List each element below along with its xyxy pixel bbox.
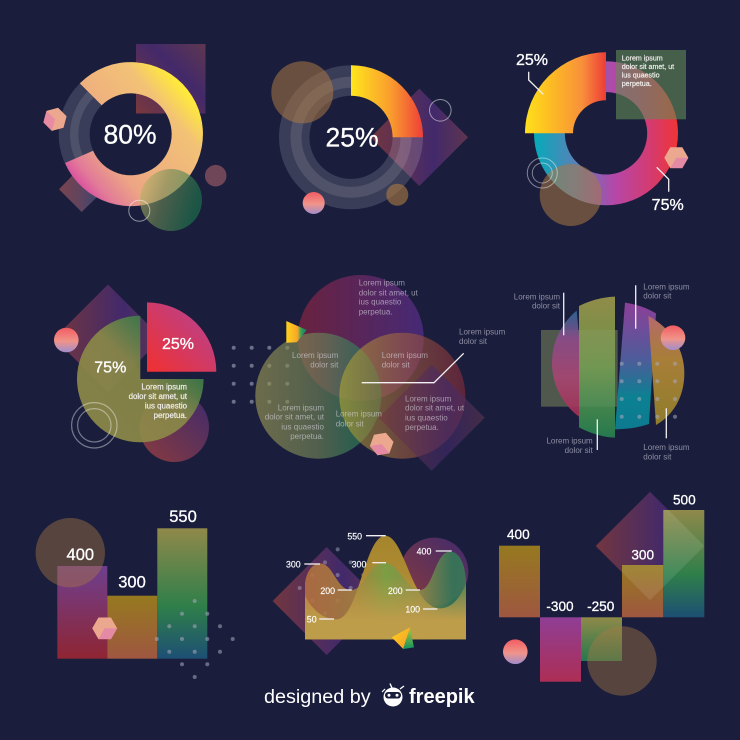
label top right: dolor sit bbox=[643, 292, 672, 301]
text block: Lorem ipsum bbox=[622, 54, 663, 62]
green circle bbox=[140, 169, 202, 231]
value labels: 400 bbox=[417, 547, 431, 557]
bar 550 bbox=[157, 528, 207, 659]
value 80%: 80% bbox=[103, 120, 157, 150]
outline ring bbox=[129, 200, 150, 221]
small brown circle bbox=[386, 184, 408, 206]
labels bbox=[507, 492, 696, 614]
bar -250 bbox=[581, 617, 622, 661]
text block top: perpetua. bbox=[359, 307, 393, 316]
text label bottom overlap: Lorem ipsum bbox=[336, 410, 382, 419]
label bottom left: dolor sit bbox=[565, 446, 593, 455]
labels: -250 bbox=[587, 599, 615, 614]
text block right circle: Lorem ipsum bbox=[405, 394, 452, 403]
text label right overlap: dolor sit bbox=[382, 360, 410, 369]
right circle bbox=[339, 333, 465, 459]
panel: venn diagram bbox=[232, 275, 506, 471]
bar 300 bbox=[107, 596, 157, 659]
pie 75 percent bbox=[77, 316, 204, 442]
leader line 25 bbox=[529, 72, 543, 94]
text label right: Lorem ipsum bbox=[459, 327, 506, 336]
value labels bbox=[286, 531, 431, 624]
purple diamond bbox=[54, 284, 162, 392]
track ring bbox=[294, 80, 408, 194]
leader lines bbox=[564, 285, 666, 450]
pie slice 25 percent bbox=[147, 302, 216, 372]
value 25%: 25% bbox=[325, 122, 379, 152]
icon: ball bbox=[54, 328, 79, 352]
value labels: 50 bbox=[307, 614, 317, 624]
freepik wordmark: freepik bbox=[409, 686, 475, 708]
diamond bbox=[379, 365, 485, 471]
text block right circle: dolor sit amet, ut bbox=[405, 404, 465, 413]
text label right overlap: Lorem ipsum bbox=[382, 351, 428, 360]
top circle bbox=[298, 275, 424, 401]
circle bottom right bbox=[140, 393, 209, 462]
brown circle bbox=[271, 61, 333, 123]
double outline ring bbox=[527, 158, 557, 188]
text block: perpetua. bbox=[154, 411, 187, 420]
donut ring 75 percent bbox=[549, 77, 663, 190]
dots bbox=[155, 599, 235, 679]
outline ring bbox=[430, 100, 451, 121]
text block: dolor sit amet, ut bbox=[129, 392, 188, 401]
panel: donut 80% bbox=[42, 44, 227, 231]
value markers bbox=[304, 536, 452, 619]
labels: 300 bbox=[631, 548, 654, 562]
label 75%: 75% bbox=[652, 197, 684, 214]
small circle bbox=[205, 165, 226, 186]
label bottom left: Lorem ipsum bbox=[546, 437, 593, 446]
text block: Lorem ipsum bbox=[141, 382, 187, 392]
value labels: 300 bbox=[286, 560, 301, 570]
bar 500 bbox=[663, 510, 704, 617]
text block left circle: perpetua. bbox=[290, 432, 324, 441]
icon: ball bbox=[503, 639, 528, 664]
labels: -300 bbox=[546, 599, 574, 614]
value labels: 200 bbox=[320, 586, 335, 596]
diamond overlap tint bbox=[622, 510, 704, 600]
text block top: ius quaestio bbox=[359, 298, 402, 307]
wave shapes bbox=[273, 536, 468, 655]
dots bbox=[620, 362, 677, 419]
green square bbox=[616, 50, 686, 119]
text block left circle: Lorem ipsum bbox=[278, 403, 324, 412]
panel: area chart bbox=[273, 531, 468, 655]
label top left: Lorem ipsum bbox=[514, 292, 560, 301]
yellow quarter arc bbox=[525, 52, 606, 133]
label 75%: 75% bbox=[94, 360, 126, 376]
bar 400 bbox=[57, 566, 107, 659]
bar 400 bbox=[499, 546, 540, 617]
diamond bbox=[596, 492, 704, 600]
label 400: 400 bbox=[67, 546, 94, 564]
gradient slices bbox=[541, 297, 684, 438]
text block top: dolor sit amet, ut bbox=[359, 288, 419, 297]
label 300: 300 bbox=[118, 574, 146, 592]
icon: ball bbox=[303, 192, 325, 214]
donut arc 25 percent bbox=[351, 65, 423, 137]
double outline ring bbox=[72, 403, 117, 448]
value labels: 100 bbox=[405, 604, 420, 614]
label 25%: 25% bbox=[162, 336, 194, 353]
text block: perpetua. bbox=[622, 80, 652, 88]
panel: bar chart 400 300 550 bbox=[36, 508, 235, 679]
bar 300 bbox=[622, 565, 663, 617]
value labels: 300 bbox=[352, 560, 366, 570]
grey track ring bbox=[74, 78, 187, 191]
text block: ius quaestio bbox=[145, 401, 188, 410]
label top right: Lorem ipsum bbox=[643, 282, 690, 291]
donut arc 80 percent bbox=[65, 62, 203, 206]
icon: hexagon bbox=[661, 142, 691, 173]
panel: sliced circle chart bbox=[514, 282, 690, 461]
footer: freepik credit bbox=[264, 684, 475, 708]
text label bottom overlap: dolor sit bbox=[336, 419, 364, 428]
text block: dolor sit amet, ut bbox=[622, 63, 674, 71]
brown circle bbox=[540, 164, 602, 226]
value labels: 200 bbox=[388, 586, 403, 596]
icon: freepik mascot bbox=[382, 684, 404, 706]
designed by: designed by bbox=[264, 686, 371, 708]
text block left circle: dolor sit amet, ut bbox=[265, 413, 325, 422]
dots bbox=[232, 346, 289, 404]
purple square bbox=[136, 44, 206, 114]
panel: donut 75/25 bbox=[516, 50, 691, 226]
text block right circle: perpetua. bbox=[405, 423, 439, 432]
text label left overlap: dolor sit bbox=[310, 360, 339, 369]
diamond bbox=[59, 166, 105, 212]
icon: hexagon bbox=[42, 105, 68, 134]
leader line bbox=[362, 353, 464, 383]
brown circle bbox=[36, 518, 105, 587]
left circle bbox=[255, 333, 381, 459]
panel: pie 75/25 bbox=[54, 284, 216, 462]
text block right circle: ius quaestio bbox=[405, 413, 448, 422]
panel: positive and negative bars bbox=[499, 492, 704, 696]
panel: donut 25% bbox=[271, 61, 468, 214]
bar -300 bbox=[540, 617, 581, 682]
icon: hexagon bbox=[89, 612, 120, 645]
text block: ius quaestio bbox=[622, 72, 660, 80]
label bottom right: dolor sit bbox=[643, 452, 672, 461]
leader line 75 bbox=[657, 167, 669, 192]
icon: triangle bbox=[286, 321, 307, 343]
value labels: 550 bbox=[347, 531, 362, 541]
icon: hexagon bbox=[368, 429, 396, 459]
text label right: dolor sit bbox=[459, 337, 488, 346]
diamond bbox=[371, 89, 468, 186]
text label left overlap: Lorem ipsum bbox=[292, 351, 339, 360]
text block left circle: ius quaestio bbox=[281, 422, 325, 431]
labels: 500 bbox=[673, 492, 696, 508]
label top left: dolor sit bbox=[532, 302, 561, 311]
labels: 400 bbox=[507, 527, 530, 542]
icon: ball bbox=[661, 325, 685, 350]
label 550: 550 bbox=[169, 508, 197, 526]
label bottom right: Lorem ipsum bbox=[643, 443, 690, 452]
brown circle bbox=[587, 626, 657, 696]
text block top: Lorem ipsum bbox=[359, 279, 405, 288]
label 25%: 25% bbox=[516, 52, 548, 69]
